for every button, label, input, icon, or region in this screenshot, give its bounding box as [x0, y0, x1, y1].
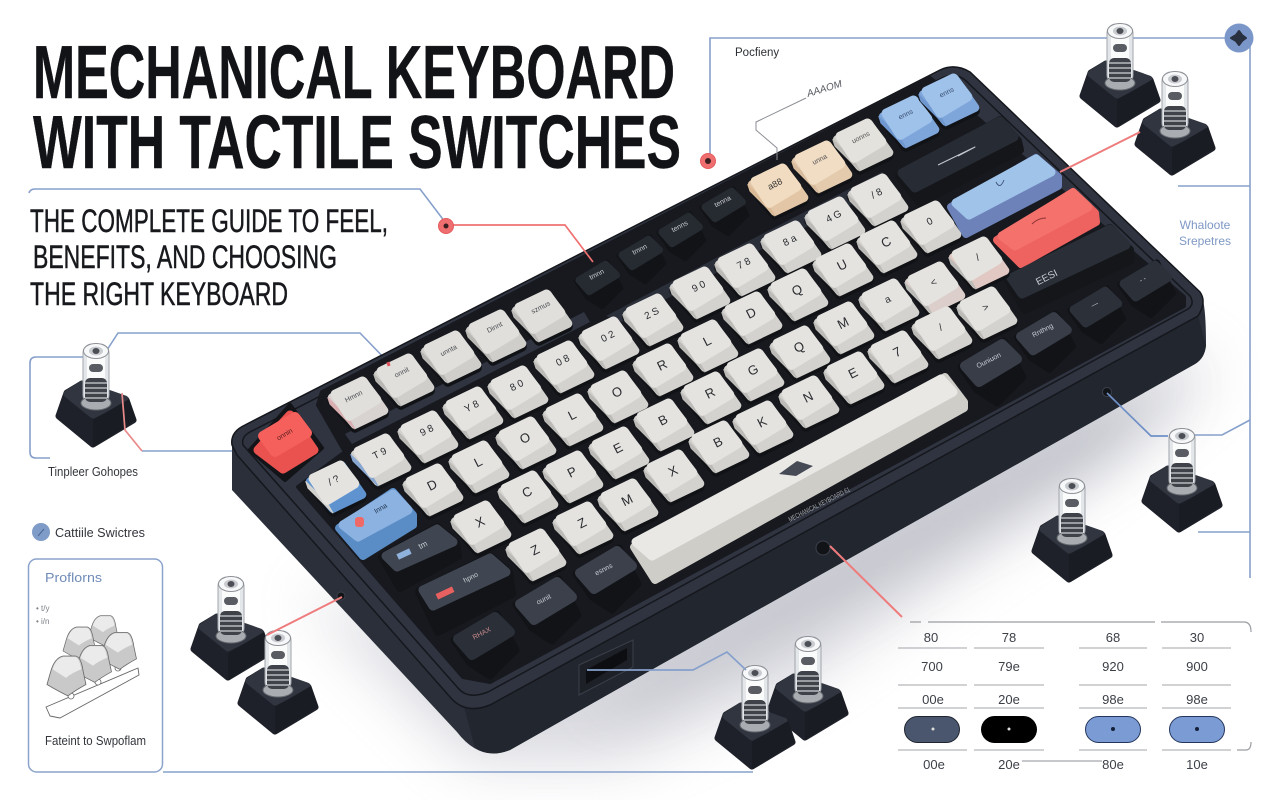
table frame: [910, 622, 1251, 750]
row C keys: /: [974, 252, 982, 264]
panel bullets: • i/n: [36, 617, 49, 626]
table row 2: 920: [1102, 659, 1124, 674]
function row grey keys: Dinnt: [486, 321, 504, 335]
subtitle: THE RIGHT KEYBOARD: [30, 276, 288, 312]
subtitle: [30, 203, 388, 312]
row A keys: 9 0: [690, 279, 708, 295]
row B keys: D: [743, 304, 759, 322]
right dark keys: [961, 262, 1173, 403]
table row 4: 10e: [1186, 757, 1208, 772]
table row 4: 80e: [1102, 757, 1124, 772]
table row 4: [923, 757, 1208, 772]
subtitle: THE COMPLETE GUIDE TO FEEL,: [30, 203, 388, 239]
row B keys: [403, 205, 957, 516]
cream and blue top keys: enns: [939, 86, 956, 100]
red escape key: onnin: [276, 428, 294, 442]
top row dark keys: tmnn: [631, 243, 649, 257]
table row 3: 00e: [922, 692, 944, 707]
row A keys: Y 8: [463, 399, 481, 415]
row C keys: E: [611, 439, 626, 457]
plate strip between rows: [345, 312, 590, 444]
table row 1: 68: [1106, 630, 1120, 645]
row C keys: B: [656, 411, 670, 429]
blue key: Inna: [373, 503, 389, 515]
long dark key: [899, 120, 1020, 203]
cream and blue top keys: uonns: [851, 130, 872, 145]
row A keys: [306, 178, 904, 513]
table row 3: [922, 692, 1208, 707]
wide dark keys: hpno: [462, 571, 480, 585]
bottom dark keys: ounit: [536, 593, 552, 607]
row A keys: 7 8: [735, 256, 753, 272]
row C keys: P: [565, 463, 579, 481]
switch: bottom left rear: [194, 576, 271, 680]
right dark keys: Ouniuon: [976, 352, 1002, 370]
table row 4: 00e: [923, 757, 945, 772]
top row dark keys: tenna: [714, 195, 732, 209]
row A keys: 9 8: [418, 423, 436, 439]
switch: bottom centre front: [718, 666, 795, 769]
cream and blue top keys: a88: [766, 176, 784, 192]
label: Pocfieny: Pocfieny: [735, 47, 779, 59]
cream and blue top keys: [748, 78, 975, 216]
plate inner lip: [243, 75, 1192, 695]
row D keys: E: [846, 364, 861, 382]
table row 1: 30: [1190, 630, 1204, 645]
panel: problems: [28, 559, 162, 772]
front right face: [463, 316, 1206, 754]
row A keys: / ?: [327, 473, 342, 488]
label: right blue: [1179, 218, 1231, 248]
row C keys: G: [745, 361, 761, 379]
icon: corner badge: [1224, 24, 1254, 52]
USB port: [579, 640, 633, 695]
top row dark keys: tmnn: [588, 268, 606, 282]
row B keys: L: [471, 454, 485, 470]
table row 2: 900: [1186, 659, 1208, 674]
switch: bottom left front: [241, 630, 318, 734]
title: WITH TACTILE SWITCHES: [33, 100, 681, 184]
row B keys: C: [878, 233, 894, 251]
row B keys: 0: [925, 216, 935, 228]
keyboard: [232, 67, 1206, 754]
switch: upper right: [1083, 24, 1160, 127]
wide dark keys: tm: [417, 539, 429, 551]
cream and blue top keys: unna: [811, 153, 829, 167]
panel caption: Fateint to Swpoflam: [45, 734, 146, 748]
cream and blue top keys: enns: [898, 108, 915, 122]
panel bullets: [36, 604, 49, 626]
row C keys: M: [835, 314, 851, 332]
row D keys: Z: [575, 514, 589, 531]
row A keys: 8 0: [508, 378, 526, 394]
table: switch specs: [898, 622, 1251, 772]
row A keys: 2 S: [643, 306, 661, 322]
model strip text: MECHANICAL KEYBOARD 61: [788, 487, 852, 524]
title: MECHANICAL KEYBOARD: [33, 30, 675, 114]
wide dark keys: [382, 527, 512, 632]
table row 3: 98e: [1102, 692, 1124, 707]
row B keys: O: [609, 383, 625, 401]
escape well: [250, 405, 322, 480]
row B keys: O: [517, 429, 533, 447]
row C keys: C: [519, 483, 535, 501]
right dark keys: Rnthng: [1031, 323, 1055, 339]
row B keys: L: [565, 407, 579, 423]
row B keys: R: [654, 356, 670, 374]
row D keys: 7: [890, 344, 904, 360]
row C keys: Q: [791, 338, 807, 356]
row C keys: [451, 241, 1005, 553]
title: [33, 30, 681, 184]
table rules: [898, 648, 1231, 750]
row A keys: 8 a: [781, 233, 799, 249]
panel heading: Proflorns: [45, 571, 102, 585]
right dark keys: —: [1090, 300, 1100, 310]
top plate: [232, 67, 1203, 709]
table pills: [904, 716, 1224, 743]
row D keys: B: [711, 433, 725, 451]
row A keys: 4 G: [824, 208, 844, 226]
label: left switch: Tinpleer Gohopes: [48, 465, 138, 479]
label: right blue: Srepetres: [1179, 234, 1231, 248]
table row 1: [924, 630, 1204, 645]
switch: right: [1138, 72, 1215, 175]
label: AAAOM: AAAOM: [805, 79, 844, 100]
row A keys: / 8: [870, 186, 885, 201]
switch: centre right: [1035, 478, 1112, 582]
label: right blue: Whaloote: [1180, 218, 1231, 232]
row C keys: X: [473, 513, 488, 531]
alpha keys: [306, 178, 1013, 581]
table row 2: 79e: [998, 659, 1020, 674]
function row grey keys: onnit: [394, 366, 410, 380]
row C keys: R: [702, 384, 718, 402]
callout dot: top: [700, 154, 716, 168]
hole: front centre: [816, 541, 830, 555]
row D keys: K: [755, 413, 770, 431]
row A keys: 0 8: [554, 353, 572, 369]
legend: tactile switches: [32, 523, 145, 541]
table row 4: 20e: [998, 757, 1020, 772]
red key: [997, 192, 1096, 264]
bottom dark keys: esnns: [594, 562, 614, 577]
subtitle: BENEFITS, AND CHOOSING: [33, 239, 337, 275]
row D keys: [506, 291, 1013, 581]
spacebar: [634, 377, 964, 580]
table row 2: [921, 659, 1208, 674]
keyboard body side: [232, 67, 1206, 753]
row A keys: 0 2: [599, 329, 617, 345]
hole: left side: [337, 592, 345, 600]
panel keycap illustration: [46, 616, 139, 718]
callout lines in front: [122, 98, 1168, 670]
table row 3: 98e: [1186, 692, 1208, 707]
switch: left: [59, 344, 136, 447]
table row 2: 700: [921, 659, 943, 674]
row D keys: M: [619, 491, 635, 509]
keyboard shadow: [300, 350, 1210, 760]
table row 1: 80: [924, 630, 938, 645]
top row dark keys: [576, 189, 747, 307]
blue key: [339, 492, 413, 556]
row B keys: U: [834, 256, 850, 274]
row D keys: N: [800, 388, 816, 406]
function row grey keys: szmus: [530, 300, 552, 316]
function row grey keys: Hmnn: [344, 390, 364, 404]
legend: tactile switches: Cattiile Swictres: [55, 526, 145, 540]
row B keys: L: [700, 333, 714, 349]
red escape key: [258, 415, 314, 469]
table row 3: 20e: [998, 692, 1020, 707]
key well: [298, 78, 1184, 682]
right dark keys: - -: [1138, 275, 1148, 285]
function row grey keys: unnta: [440, 344, 458, 358]
row D keys: Z: [528, 541, 542, 558]
panel bullets: • t/y: [36, 604, 49, 613]
row D keys: X: [666, 462, 681, 480]
top row dark keys: tenns: [671, 220, 690, 234]
row D keys: /: [937, 322, 945, 334]
row D keys: >: [981, 302, 991, 314]
table row 1: 78: [1002, 630, 1016, 645]
row A keys: T 9: [371, 446, 389, 462]
row B keys: D: [424, 476, 440, 494]
long dark key lower: EESI: [1034, 268, 1060, 288]
hole: front right: [1102, 388, 1112, 396]
row C keys: a: [883, 294, 893, 306]
bottom dark keys: RHAX: [472, 626, 493, 642]
long blue key: [951, 158, 1058, 234]
callout dot: subtitle: [438, 218, 454, 234]
row C keys: <: [929, 277, 939, 289]
switch: right lower: [1145, 428, 1222, 532]
function row grey keys: [328, 294, 568, 429]
switch: bottom centre rear: [771, 636, 848, 740]
bottom dark keys: [454, 548, 638, 676]
row B keys: Q: [789, 281, 805, 299]
long dark key lower: [1008, 228, 1131, 310]
